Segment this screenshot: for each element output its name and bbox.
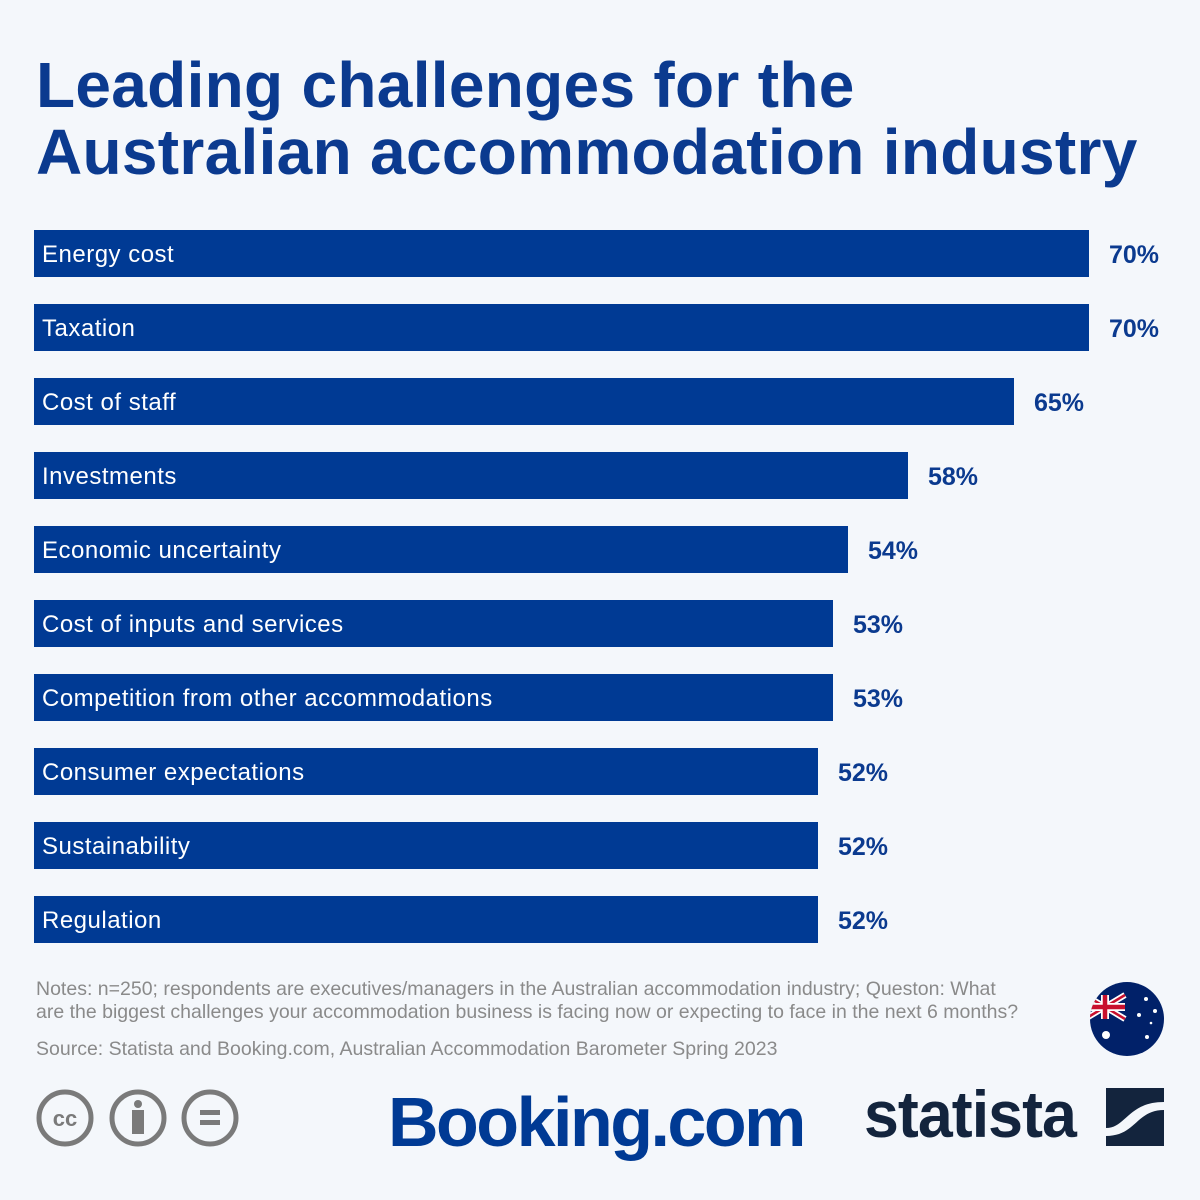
bar: Consumer expectations: Consumer expectations [42, 759, 305, 786]
bar: Cost of inputs and services: 53% [853, 611, 903, 639]
bar: Economic uncertainty: Economic uncertainty [42, 537, 281, 564]
bar: Investments: Investments [42, 463, 177, 490]
bar: Economic uncertainty [34, 526, 918, 573]
icon: creative commons: cc [53, 1106, 77, 1131]
bar: Energy cost: Energy cost [42, 241, 174, 268]
bar: Investments [34, 452, 978, 499]
title: Australian accommodation industry [36, 116, 1138, 188]
bar: Competition: 53% [853, 685, 903, 713]
bar: Cost of inputs and services: Cost of inputs and services [42, 611, 344, 638]
title: Leading challenges for the [36, 49, 855, 121]
bar: Cost of staff [34, 378, 1084, 425]
bar: Consumer expectations: 52% [838, 759, 888, 787]
bar: Sustainability: Sustainability [42, 833, 190, 860]
bar: Competition: Competition from other accommodations [42, 685, 493, 712]
icon: creative commons [36, 1090, 238, 1146]
bar: Taxation: 70% [1109, 315, 1159, 343]
bar: Regulation: 52% [838, 907, 888, 935]
notes: are the biggest challenges your accommodation business is facing now or expecting to face in the next 6 months? [36, 1001, 1018, 1023]
icon: Australian flag [1090, 982, 1164, 1056]
bar: Cost of inputs and services [34, 600, 903, 647]
source: Source: Statista and Booking.com, Australian Accommodation Barometer Spring 2023 [36, 1038, 777, 1060]
bar: Investments: 58% [928, 463, 978, 491]
bar: Regulation: Regulation [42, 907, 162, 934]
bar: Economic uncertainty: 54% [868, 537, 918, 565]
logo: statista: statista [864, 1077, 1076, 1151]
bar: Regulation [34, 896, 888, 943]
bar: Taxation [34, 304, 1159, 351]
bar: Consumer expectations [34, 748, 888, 795]
bar: Sustainability: 52% [838, 833, 888, 861]
title [36, 49, 1138, 188]
bar: Cost of staff: Cost of staff [42, 389, 176, 416]
bar: Taxation: Taxation [42, 315, 135, 342]
bar: Sustainability [34, 822, 888, 869]
bar: Energy cost [34, 230, 1159, 277]
logo: Booking.com: Booking.com [388, 1083, 804, 1161]
notes [36, 978, 1018, 1023]
bar: Competition [34, 674, 903, 721]
bar chart [34, 230, 1159, 943]
notes: Notes: n=250; respondents are executives/managers in the Australian accommodation industry; Queston: What [36, 978, 996, 1000]
bar: Cost of staff: 65% [1034, 389, 1084, 417]
bar: Energy cost: 70% [1109, 241, 1159, 269]
